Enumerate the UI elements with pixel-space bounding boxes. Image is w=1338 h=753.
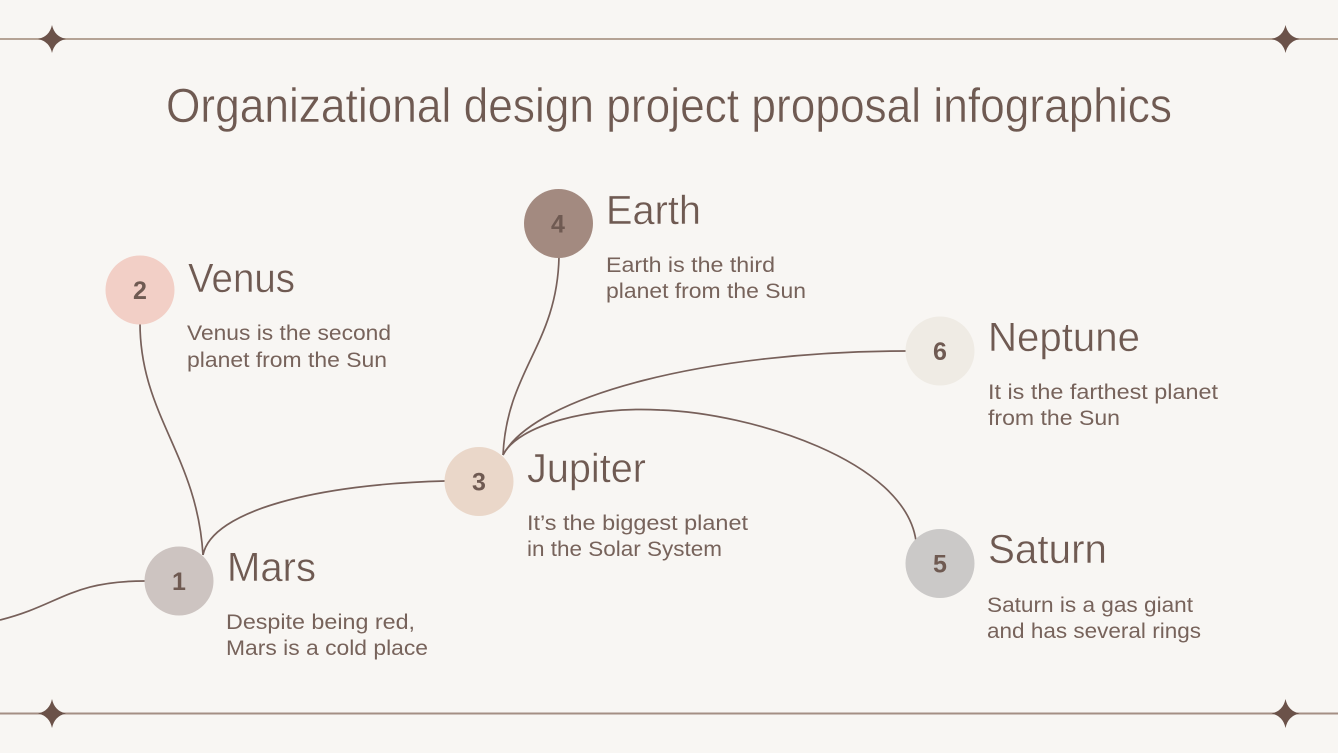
node 6: Neptune: 6 bbox=[933, 338, 947, 366]
node 4: Earth: Earth bbox=[606, 187, 701, 233]
text: Mars description: Mars is a cold place bbox=[226, 637, 428, 660]
text: Venus description bbox=[187, 322, 391, 372]
text: Jupiter description bbox=[527, 512, 748, 561]
node 4: Earth: 4 bbox=[551, 210, 565, 238]
node 5: Saturn: 5 bbox=[933, 550, 947, 578]
node 2: Venus: Venus bbox=[188, 255, 295, 301]
text: Jupiter description: It’s the biggest planet bbox=[527, 512, 748, 535]
text: Neptune description bbox=[988, 381, 1218, 430]
top divider with stars bbox=[0, 25, 1338, 53]
text: Neptune description: from the Sun bbox=[988, 407, 1120, 430]
node 1: Mars bbox=[144, 544, 428, 660]
text: Saturn description: Saturn is a gas giant bbox=[987, 594, 1193, 617]
text: Mars description bbox=[226, 611, 428, 660]
node 1: Mars: Mars bbox=[227, 544, 316, 590]
node 6: Neptune bbox=[906, 314, 1218, 430]
title: Organizational design project proposal infographics bbox=[166, 80, 1172, 133]
text: Saturn description: and has several rings bbox=[987, 620, 1201, 643]
node 5: Saturn: Saturn bbox=[988, 526, 1107, 572]
node 4: Earth bbox=[524, 187, 806, 303]
node 3: Jupiter bbox=[444, 445, 748, 561]
node 1: Mars: 1 bbox=[172, 568, 186, 596]
text: Venus description: planet from the Sun bbox=[187, 349, 387, 372]
node 3: Jupiter: 3 bbox=[472, 468, 486, 496]
text: Jupiter description: in the Solar System bbox=[527, 538, 722, 561]
bottom divider with stars bbox=[0, 699, 1338, 728]
node 3: Jupiter: Jupiter bbox=[527, 445, 646, 491]
text: Saturn description bbox=[987, 594, 1201, 643]
text: Earth description bbox=[606, 254, 806, 303]
text: Venus description: Venus is the second bbox=[187, 322, 391, 345]
node 2: Venus: 2 bbox=[133, 277, 147, 305]
node 5: Saturn bbox=[906, 526, 1201, 643]
connecting lines bbox=[0, 257, 916, 620]
text: Earth description: Earth is the third bbox=[606, 254, 775, 277]
text: Mars description: Despite being red, bbox=[226, 611, 415, 634]
text: Neptune description: It is the farthest planet bbox=[988, 381, 1218, 404]
text: Earth description: planet from the Sun bbox=[606, 280, 806, 303]
node 2: Venus bbox=[106, 255, 391, 372]
node 6: Neptune: Neptune bbox=[988, 314, 1140, 360]
